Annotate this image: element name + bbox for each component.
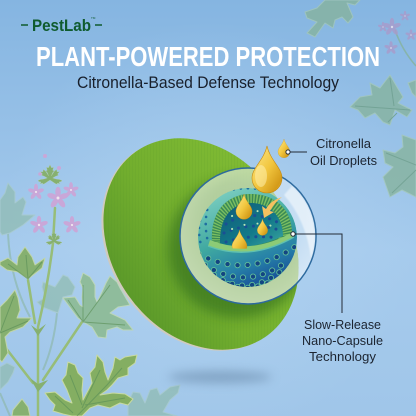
leaf cluster bbox=[305, 0, 416, 197]
stems bbox=[5, 208, 82, 416]
label: slow-release nano-capsule technology: Nano-Capsule bbox=[302, 333, 383, 348]
label: slow-release nano-capsule technology: Technology bbox=[309, 349, 376, 364]
leaves bbox=[0, 165, 137, 416]
large bottom leaf bbox=[45, 355, 137, 416]
foreground plant, left bbox=[0, 154, 137, 416]
label: slow-release nano-capsule technology: Slow-Release bbox=[304, 317, 381, 332]
bubble bbox=[180, 168, 316, 304]
label: citronella oil droplets: Oil Droplets bbox=[310, 153, 377, 168]
ground shadow bbox=[168, 371, 272, 383]
leader line: citronella oil droplets bbox=[286, 150, 307, 154]
small bottom leaf bbox=[12, 399, 30, 416]
leaf right of stem bbox=[63, 273, 133, 338]
nano-capsule sphere bbox=[198, 188, 297, 288]
membrane bristles bbox=[212, 194, 292, 243]
leader line: nano-capsule bbox=[291, 232, 342, 313]
flowers bbox=[28, 154, 81, 234]
release arrow bbox=[262, 197, 282, 218]
node bracts bbox=[30, 324, 48, 392]
leaf veins bbox=[0, 255, 125, 416]
label: slow-release nano-capsule technology bbox=[302, 317, 383, 364]
green textile patch bbox=[102, 138, 299, 351]
left edge leaf bbox=[0, 290, 32, 362]
faded background plant, top right bbox=[305, 0, 416, 197]
subtitle: Citronella-Based Defense Technology bbox=[77, 74, 340, 92]
cutaway shell bbox=[212, 194, 292, 247]
cavity pores bbox=[224, 211, 279, 242]
upper small leaf bbox=[0, 247, 45, 279]
faded background plant, left bbox=[0, 183, 180, 416]
outer pores bbox=[199, 188, 296, 288]
capsule shadow on patch bbox=[168, 178, 308, 318]
oil droplets bbox=[232, 139, 290, 254]
label: citronella oil droplets: Citronella bbox=[316, 136, 372, 151]
cut rim bbox=[208, 234, 294, 252]
label: citronella oil droplets bbox=[310, 136, 377, 168]
logo: PestLab: PestLab bbox=[32, 16, 91, 35]
logo: PestLab: TM bbox=[91, 16, 96, 20]
magnifying bubble with nano-capsule bbox=[180, 168, 316, 304]
bubble highlight bbox=[284, 186, 315, 258]
faded flowers bbox=[378, 11, 416, 55]
inner cavity bbox=[220, 203, 283, 247]
